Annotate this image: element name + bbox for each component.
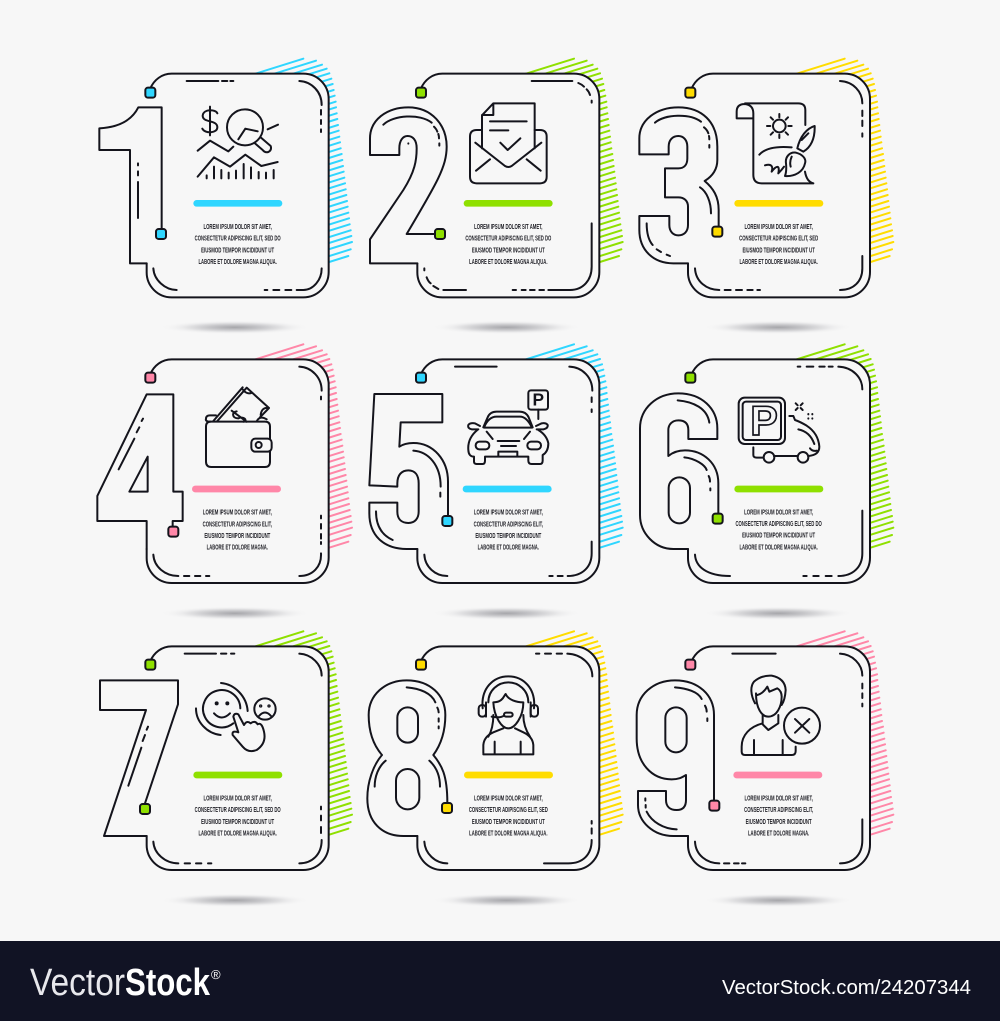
text block: LOREM IPSUM DOLOR SIT AMET, — [203, 508, 272, 517]
text block: LOREM IPSUM DOLOR SIT AMET, — [744, 793, 813, 802]
node: top — [145, 660, 155, 670]
text block — [195, 222, 281, 266]
text block: LABORE ET DOLORE MAGNA ALIQUA. — [198, 829, 277, 838]
icon: smile and sad faces with hand — [196, 683, 276, 751]
text block: LABORE ET DOLORE MAGNA. — [207, 543, 268, 552]
text block — [203, 508, 272, 552]
node: numeral end — [140, 804, 150, 814]
icon: car and parking sign — [468, 390, 548, 464]
bar — [193, 772, 282, 778]
stripes — [253, 344, 352, 557]
numeral 1 — [99, 107, 162, 263]
icon: dollar magnifier chart — [198, 107, 278, 178]
node: top — [685, 373, 695, 383]
node: numeral end — [442, 803, 452, 813]
shadow — [432, 893, 582, 907]
frame accents — [695, 81, 862, 290]
bar — [193, 200, 282, 207]
panel 9: remove user — [637, 631, 893, 907]
node: numeral end — [435, 229, 445, 239]
text block: CONSECTETUR ADIPISCING ELIT, SED DO — [465, 234, 552, 243]
frame — [147, 359, 329, 583]
node: top — [685, 660, 695, 670]
text block — [739, 222, 818, 266]
node: numeral end — [709, 801, 719, 811]
frame — [688, 74, 870, 297]
text block: LOREM IPSUM DOLOR SIT AMET, — [474, 222, 542, 231]
text block: LABORE ET DOLORE MAGNA. — [748, 829, 809, 838]
node: numeral end — [156, 229, 166, 239]
frame — [147, 74, 329, 297]
text block: CONSECTETUR ADIPISCING ELIT, SED — [469, 805, 548, 814]
text block: LOREM IPSUM DOLOR SIT AMET, — [203, 793, 272, 802]
bar — [464, 200, 553, 207]
panel 3: art scroll — [639, 59, 893, 334]
icon: scroll and brush — [737, 103, 815, 183]
stripes — [795, 344, 893, 557]
image id: VectorStock.com/24207344 — [722, 977, 971, 999]
frame accents — [153, 367, 322, 576]
bar — [192, 486, 281, 492]
icon: parking truck — [739, 398, 819, 463]
stripes — [253, 59, 352, 272]
text block: LABORE ET DOLORE MAGNA ALIQUA. — [469, 257, 547, 266]
numeral 9 — [637, 680, 714, 836]
stripes — [524, 344, 623, 557]
panel 8: support operator — [367, 631, 623, 907]
numeral 5 — [369, 394, 448, 549]
text block — [465, 222, 552, 266]
stripes — [795, 59, 893, 272]
text block: EIUSMOD TEMPOR INCIDIDUNT — [475, 531, 542, 540]
bar — [733, 772, 822, 778]
text block: LABORE ET DOLORE MAGNA ALIQUA. — [198, 257, 277, 266]
panel 4: wallet — [97, 344, 352, 620]
node: top — [416, 660, 426, 670]
node: top — [685, 88, 695, 98]
node: top — [416, 88, 426, 98]
frame — [417, 74, 599, 297]
frame accents — [424, 367, 592, 576]
frame accents — [153, 81, 322, 290]
icon: wallet with cash — [206, 387, 272, 467]
text block: EIUSMOD TEMPOR INCIDIDUNT UT — [472, 245, 545, 254]
shadow — [703, 893, 853, 907]
numeral 8 — [367, 680, 447, 836]
registered mark: ® — [211, 967, 221, 982]
text block: CONSECTETUR ADIPISCING ELIT, SED DO — [195, 234, 281, 243]
text block: LABORE ET DOLORE MAGNA. — [478, 543, 539, 552]
text block — [474, 508, 543, 552]
text block: CONSECTETUR ADIPISCING ELIT, SED — [739, 234, 818, 243]
frame — [417, 359, 599, 583]
frame accents — [695, 367, 862, 576]
text block: EIUSMOD TEMPOR INCIDIDUNT UT — [201, 245, 274, 254]
frame accents — [424, 81, 592, 290]
node: top — [416, 373, 426, 383]
node: numeral end — [712, 227, 722, 237]
footer bar — [0, 941, 1000, 1021]
node: numeral end — [168, 527, 178, 537]
numeral 7 — [100, 680, 178, 836]
text block: CONSECTETUR ADIPISCING ELIT, — [744, 805, 813, 814]
icon letter: parking P: P — [533, 390, 544, 410]
text block: LOREM IPSUM DOLOR SIT AMET, — [474, 793, 543, 802]
logo wordmark: Vector: Vector — [30, 962, 125, 1004]
text block: LOREM IPSUM DOLOR SIT AMET, — [744, 507, 813, 516]
text block: EIUSMOD TEMPOR INCIDIDUNT UT — [472, 817, 545, 826]
node: numeral end — [713, 514, 723, 524]
bar — [463, 486, 552, 492]
frame — [417, 646, 599, 870]
numeral 3 — [639, 107, 719, 263]
shadow — [703, 320, 853, 334]
numeral 6 — [640, 393, 718, 549]
stripes — [524, 631, 623, 844]
text block: LOREM IPSUM DOLOR SIT AMET, — [744, 222, 813, 231]
bar — [464, 772, 553, 778]
text block: EIUSMOD TEMPOR INCIDIDUNT — [204, 531, 271, 540]
text block: EIUSMOD TEMPOR INCIDIDUNT — [746, 817, 812, 826]
text block: LABORE ET DOLORE MAGNA ALIQUA. — [739, 542, 818, 551]
logo wordmark: Stock: Stock — [125, 962, 211, 1004]
stripes — [795, 631, 893, 844]
panel 2: mail — [370, 59, 623, 334]
frame accents — [153, 654, 322, 863]
bar — [734, 486, 823, 492]
node: numeral end — [442, 516, 452, 526]
panel 6: truck parking — [640, 344, 893, 620]
shadow — [703, 606, 853, 620]
stripes — [524, 59, 623, 272]
shadow — [432, 320, 582, 334]
stripes — [253, 631, 352, 844]
text block: CONSECTETUR ADIPISCING ELIT, SED DO — [735, 519, 822, 528]
text block: LABORE ET DOLORE MAGNA ALIQUA. — [469, 829, 547, 838]
numeral 4 — [97, 394, 183, 549]
icon letter: parking P: P — [750, 398, 778, 444]
shadow — [432, 606, 582, 620]
text block: LOREM IPSUM DOLOR SIT AMET, — [474, 508, 543, 517]
text block — [744, 793, 813, 838]
icon: person with cross — [742, 676, 820, 755]
text block: EIUSMOD TEMPOR INCIDIDUNT UT — [742, 245, 815, 254]
frame accents — [424, 654, 592, 863]
text block: EIUSMOD TEMPOR INCIDIDUNT UT — [742, 531, 815, 540]
shadow — [160, 606, 310, 620]
text block — [195, 793, 281, 838]
icon: operator with headset — [479, 676, 538, 754]
frame — [688, 646, 870, 870]
panel 5: car parking — [369, 344, 623, 620]
text block: LABORE ET DOLORE MAGNA ALIQUA. — [739, 257, 818, 266]
text block: CONSECTETUR ADIPISCING ELIT, — [203, 519, 272, 528]
text block: CONSECTETUR ADIPISCING ELIT, — [474, 519, 543, 528]
frame accents — [695, 654, 862, 863]
text block — [735, 507, 822, 551]
panel 7: smile rating — [100, 631, 352, 907]
frame — [688, 359, 870, 583]
text block: LOREM IPSUM DOLOR SIT AMET, — [203, 222, 272, 231]
text block — [469, 793, 548, 838]
frame — [147, 646, 329, 870]
bar — [734, 200, 823, 207]
text block: CONSECTETUR ADIPISCING ELIT, SED DO — [195, 805, 281, 814]
numeral 2 — [370, 107, 447, 263]
shadow — [160, 893, 310, 907]
node: top — [145, 88, 155, 98]
panel 1: financial analysis — [99, 59, 352, 334]
icon: mail with check — [470, 103, 547, 183]
shadow — [160, 320, 310, 334]
text block: EIUSMOD TEMPOR INCIDIDUNT UT — [201, 817, 274, 826]
node: top — [145, 373, 155, 383]
